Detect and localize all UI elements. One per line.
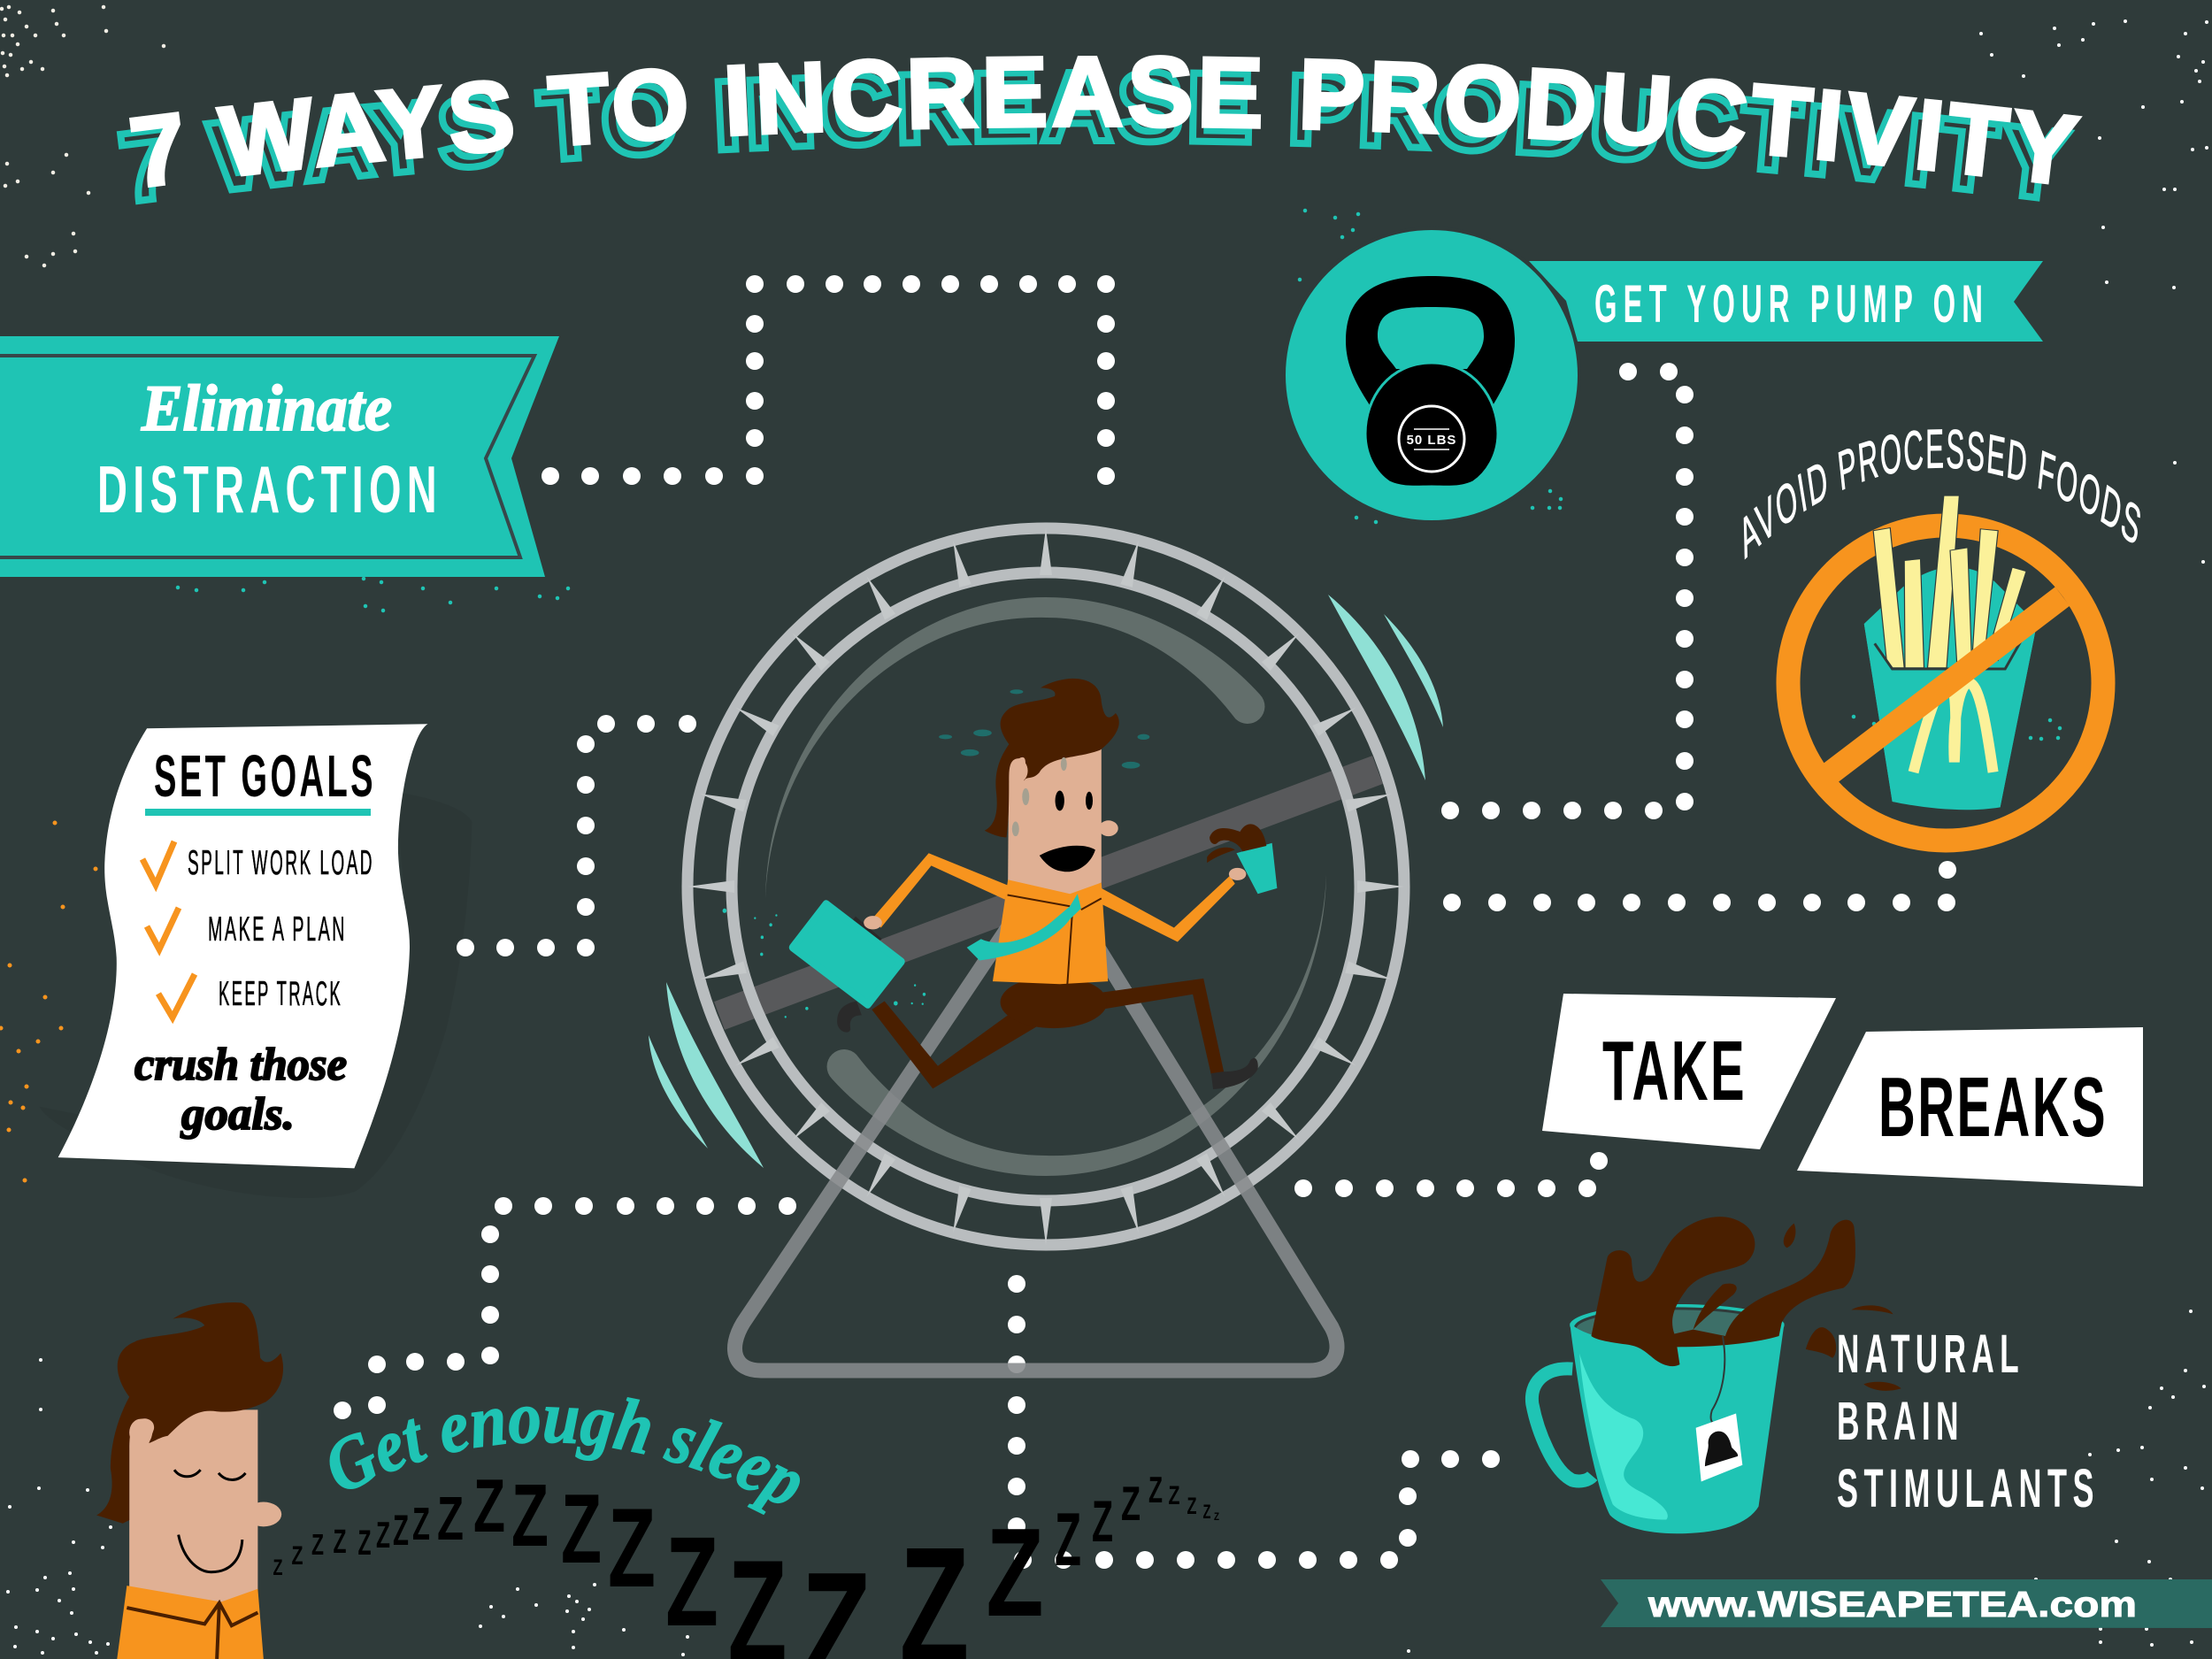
weight label xyxy=(1399,406,1464,472)
snore letters: Z xyxy=(1092,1488,1113,1554)
heading: SET GOALS xyxy=(154,743,376,810)
mug opening xyxy=(1575,1309,1779,1348)
natural brain stimulants xyxy=(1837,1324,2100,1518)
snore letters: Z xyxy=(1148,1469,1163,1510)
outer ring xyxy=(687,528,1404,1245)
highlight xyxy=(1579,1354,1668,1520)
inner ring xyxy=(732,572,1360,1201)
motion lines xyxy=(649,595,1443,1168)
left hand xyxy=(864,916,882,929)
banner: eliminate distraction: DISTRACTION xyxy=(97,452,442,526)
connector: foods xyxy=(1452,870,1947,902)
eyes xyxy=(1056,790,1064,810)
back leg xyxy=(872,1001,1037,1088)
kettlebell badge: get your pump on xyxy=(1282,227,2043,524)
check 3 xyxy=(158,974,195,1018)
snore letters: Z xyxy=(437,1484,464,1553)
snore letters: Z xyxy=(273,1555,283,1580)
teal specks xyxy=(723,909,926,1018)
note: set goals xyxy=(58,724,427,1168)
underline xyxy=(145,809,371,816)
collar and shirt lines xyxy=(1008,895,1102,984)
briefcase xyxy=(793,904,902,1004)
natural brain stimulants: NATURAL xyxy=(1837,1324,2024,1384)
get enough sleep: Get enough sleep xyxy=(329,1397,800,1515)
title: 7 WAYS TO INCREASE PRODUCTIVITY xyxy=(129,55,2083,188)
website ribbon: www.WISEAPETEA.com xyxy=(1647,1584,2137,1624)
connector: breaks xyxy=(1303,1161,1599,1188)
front leg xyxy=(1101,979,1224,1074)
paper shadow xyxy=(40,792,472,1198)
neck and face xyxy=(129,1409,257,1611)
avoid processed foods xyxy=(1743,429,2140,853)
checklist item 2: MAKE A PLAN xyxy=(208,910,347,949)
snore letters: Z xyxy=(473,1464,505,1548)
snore letters: Z xyxy=(292,1541,303,1571)
snore letters: Z xyxy=(311,1528,324,1561)
handle xyxy=(1532,1369,1593,1481)
pelvis xyxy=(1001,976,1107,1028)
mouth xyxy=(1040,846,1095,872)
snore letters: Z xyxy=(376,1514,390,1555)
front shoe xyxy=(1211,1058,1258,1089)
banner: eliminate distraction xyxy=(0,336,559,577)
shirt xyxy=(117,1586,264,1659)
snore letters: Z xyxy=(1203,1501,1210,1523)
sleeping man xyxy=(96,1302,283,1659)
running man xyxy=(723,679,1277,1089)
connector: distraction loop xyxy=(550,284,1106,476)
collar xyxy=(127,1603,257,1659)
fries box and fries xyxy=(1864,495,2037,810)
snore letters xyxy=(273,1464,1219,1659)
website ribbon xyxy=(1601,1579,2212,1628)
wheel spikes xyxy=(687,528,1404,1245)
paper xyxy=(58,724,427,1168)
natural brain stimulants: BRAIN xyxy=(1837,1391,1964,1451)
badge circle xyxy=(1282,227,1581,524)
snore letters: Z xyxy=(511,1466,549,1565)
check 1 xyxy=(142,841,174,885)
snore letters: Z xyxy=(665,1510,718,1653)
tea string xyxy=(1711,1336,1724,1424)
ban ring xyxy=(1788,526,2103,841)
rim xyxy=(1570,1304,1785,1346)
note: set goals: KEEP TRACK xyxy=(219,975,342,1013)
title: 7 WAYS TO INCREASE PRODUCTIVITY xyxy=(117,69,2076,205)
snore letters: Z xyxy=(561,1474,602,1584)
droplets xyxy=(1784,1224,1901,1391)
flying sweat xyxy=(939,689,1149,769)
crush those goals xyxy=(134,1040,347,1140)
note: set goals: SPLIT WORK LOAD xyxy=(188,844,374,882)
ear xyxy=(129,1419,152,1446)
right hand xyxy=(1229,868,1246,880)
snore letters: Z xyxy=(357,1524,372,1563)
mug body xyxy=(1570,1323,1785,1533)
kettlebell body xyxy=(1365,363,1498,487)
snore letters: Z xyxy=(393,1508,409,1555)
torso xyxy=(993,879,1108,984)
banner: eliminate distraction: Eliminate xyxy=(141,373,392,445)
top glass highlight xyxy=(765,597,1264,899)
tie xyxy=(967,894,1081,961)
snore letters: Z xyxy=(412,1499,430,1550)
tea splash xyxy=(1591,1217,1855,1366)
coffee splash xyxy=(1207,824,1266,863)
second eye xyxy=(1086,792,1093,810)
snore letters: Z xyxy=(1055,1498,1081,1582)
snore letters: Z xyxy=(608,1485,656,1610)
connector: sleep xyxy=(342,1206,787,1410)
axle bar xyxy=(719,770,1378,1016)
triangular stand xyxy=(734,867,1337,1371)
sweat drops xyxy=(1012,757,1067,836)
briefcase handle xyxy=(849,917,882,945)
left arm xyxy=(872,853,1008,927)
check 2 xyxy=(147,908,179,949)
connector: pump xyxy=(1450,372,1685,810)
tea tag xyxy=(1696,1413,1742,1482)
snore letters: Z xyxy=(1121,1476,1141,1531)
ban slash xyxy=(1829,596,2062,774)
ear xyxy=(1010,759,1028,782)
kettlebell handle xyxy=(1346,276,1515,416)
head and neck xyxy=(1008,747,1102,896)
hamster wheel xyxy=(687,528,1404,1371)
breaks panel xyxy=(1797,1027,2143,1187)
bottom glass highlight xyxy=(827,874,1326,1176)
connector: wheel to mug xyxy=(1017,1284,1491,1560)
back shoe xyxy=(837,1001,862,1033)
tea mug xyxy=(1532,1217,1901,1533)
badge fill xyxy=(1286,230,1578,520)
snore letters: Z xyxy=(1168,1481,1180,1510)
ribbon banner xyxy=(1529,261,2043,342)
hair xyxy=(96,1302,283,1524)
nose xyxy=(246,1502,281,1526)
take breaks xyxy=(1542,994,2143,1187)
snore letters: Z xyxy=(1214,1510,1219,1523)
connector: goals xyxy=(465,724,687,948)
snore letters: Z xyxy=(1187,1493,1196,1519)
dotted connector paths xyxy=(342,284,1947,1560)
weight label: 50 LBS xyxy=(1407,433,1456,448)
hair xyxy=(985,679,1119,837)
nose xyxy=(1099,820,1118,836)
snore letters: Z xyxy=(986,1502,1044,1643)
take panel xyxy=(1542,994,1836,1149)
closed eyes and smile xyxy=(174,1470,246,1572)
crush those goals: goals. xyxy=(180,1089,295,1140)
coffee cup xyxy=(1236,843,1277,894)
snore letters: Z xyxy=(333,1524,347,1561)
gorilla logo xyxy=(1705,1432,1738,1466)
right arm xyxy=(1102,876,1235,941)
curved heading: AVOID PROCESSED FOODS xyxy=(1743,429,2140,559)
take word: TAKE xyxy=(1602,1024,1747,1118)
crush those goals: crush those xyxy=(134,1040,347,1090)
